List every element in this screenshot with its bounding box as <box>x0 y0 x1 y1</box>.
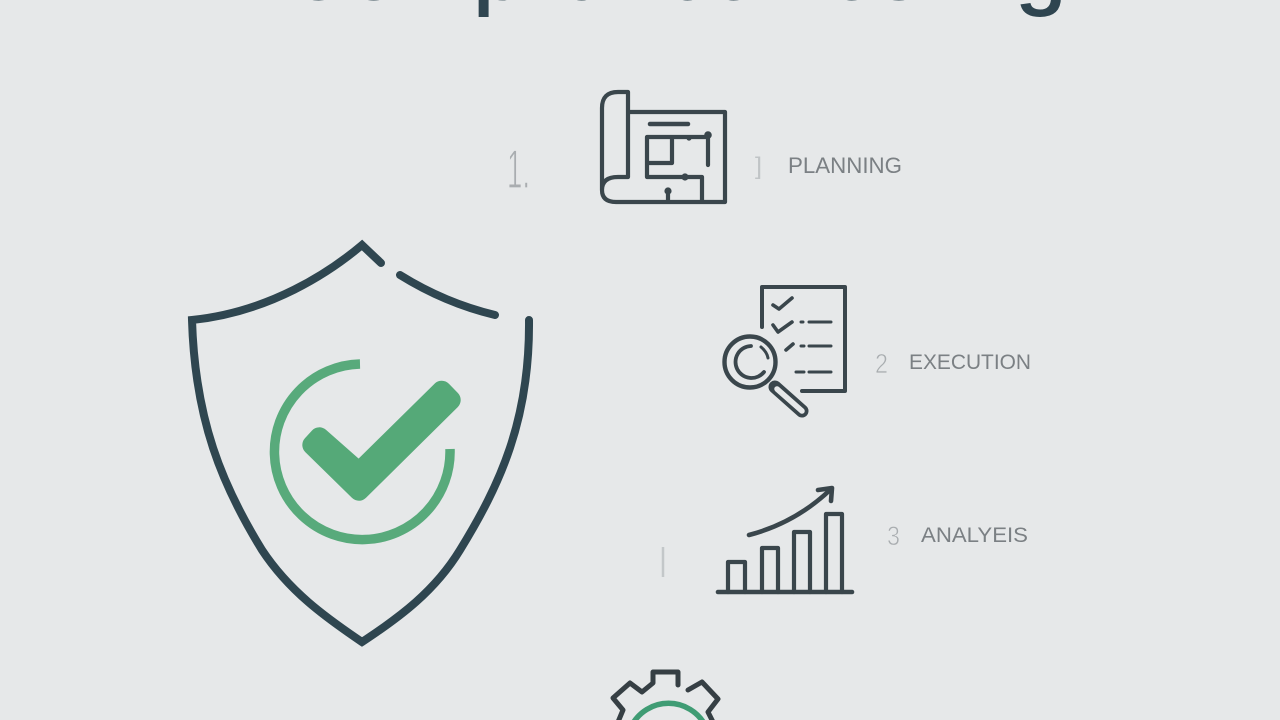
label: planning: PLANNING <box>788 153 902 178</box>
icon: gear <box>613 672 718 720</box>
number 1: 1. <box>507 138 530 200</box>
green ring <box>274 364 450 540</box>
shield outline <box>192 245 529 642</box>
green check mark <box>312 391 451 491</box>
number 2: 2 <box>875 348 888 379</box>
label: analysis: ANALYEIS <box>921 524 1028 547</box>
icon: bar chart with arrow <box>718 488 852 592</box>
step 1: planning <box>507 92 902 202</box>
icon: checklist with magnifier <box>724 287 845 411</box>
step 3: analysis <box>663 488 1028 592</box>
bracket mark: ] <box>755 153 762 180</box>
icon: shield with check <box>192 245 529 642</box>
label: execution: EXECUTION <box>909 351 1031 374</box>
icon: blueprint <box>602 92 725 202</box>
green arc <box>632 703 706 720</box>
tick mark <box>662 547 664 577</box>
number 3: 3 <box>887 521 900 551</box>
step 2: execution <box>724 287 1031 411</box>
